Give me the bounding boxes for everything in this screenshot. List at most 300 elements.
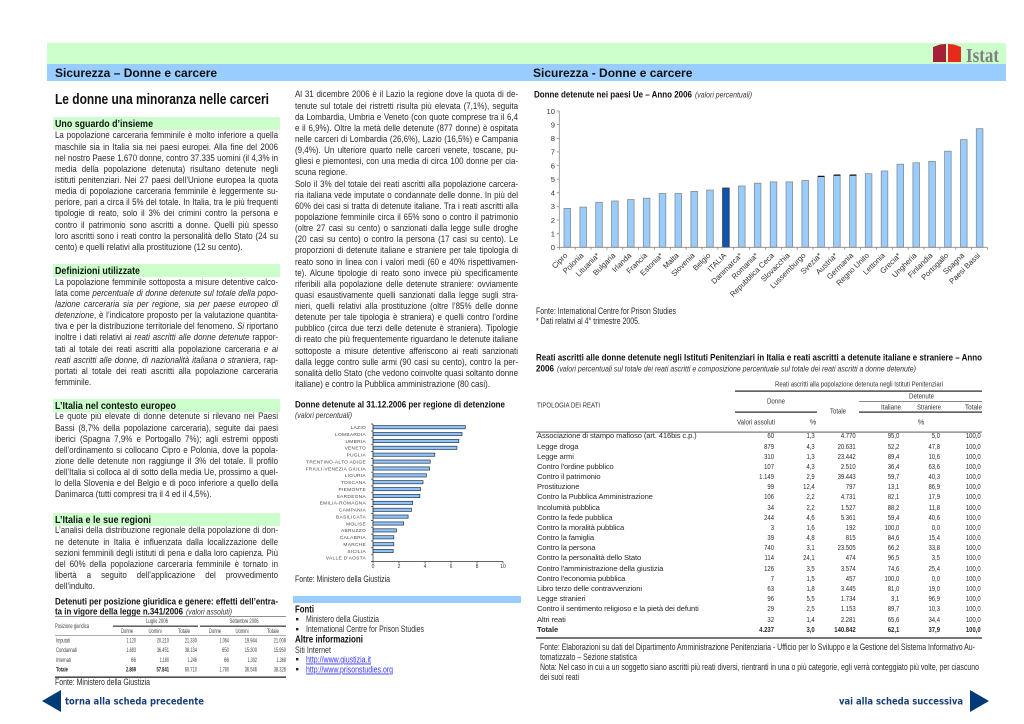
text block: Definizioni utilizzate: portati al totale dei reati ascritti alla popolazione carceraria <box>55 366 278 376</box>
text block: Definizioni utilizzate: inoltre i dati relativi ai reati ascritti alle donne detenute rappor- <box>55 332 278 342</box>
table: detenuti per posizione giuridica: 57.841 <box>156 666 169 673</box>
nav link: next: vai alla scheda successiva <box>839 696 963 708</box>
crimes table rows: 3.574 <box>841 564 856 573</box>
table: detenuti per posizione giuridica: Luglio 2006 <box>146 618 168 625</box>
text block: Uno sguardo d'insieme: nel nostro Paese 1.670 donne, contro 37.335 uomini (il 4,3% in <box>55 153 278 163</box>
text block: L'Italia nel contesto europeo: lo della Slovenia e del Belgio e di poco inferiore a quello della <box>55 478 278 488</box>
crimes table rows: 96 <box>768 594 774 603</box>
crimes table rows: 100,0 <box>966 584 981 593</box>
crimes table rows: 4,8 <box>807 533 815 542</box>
table: detenuti per posizione giuridica: 15.950 <box>274 647 286 654</box>
crimes table rows: 95,0 <box>887 431 899 440</box>
crimes table rows: Contro la Pubblica Amministrazione <box>537 492 653 501</box>
table: detenuti per posizione giuridica: 1.683 <box>126 647 136 654</box>
crimes table rows: 36,4 <box>887 462 899 471</box>
crimes table rows: 1,4 <box>807 614 815 624</box>
text block: middle column: sottoposte a misure detentive afferiscono ai reati sanzionati <box>295 346 518 356</box>
arrow: previous <box>42 690 61 712</box>
table: detenuti per posizione giuridica: 650 <box>222 647 229 654</box>
text block: middle column: sonalità dello Stato (che vedono coinvolte quasi soltanto donne <box>295 368 518 378</box>
crimes table rows: 20.631 <box>838 442 856 451</box>
crimes table rows: 96,9 <box>928 594 940 603</box>
text block: middle column: tenute sul totale dei ristretti risulta più elevata (7,1%), seguita <box>295 101 518 111</box>
text block: middle column: Al 31 dicembre 2006 è il Lazio la regione dove la quota di de- <box>295 89 518 99</box>
EU chart title: (valori percentuali) <box>695 90 752 100</box>
small table title: Detenuti per posizione giuridica e genere: effetti dell’entra- <box>55 596 278 608</box>
crimes table rows: 100,0 <box>966 513 981 522</box>
crimes table rows: 5,5 <box>807 594 815 603</box>
table: detenuti per posizione giuridica: 60.710 <box>185 666 197 673</box>
table: detenuti per posizione giuridica: Internati <box>56 657 71 664</box>
text block: Uno sguardo d'insieme: istituti penitenziari. Nei 27 paesi dell’Unione europea la quota <box>55 175 278 185</box>
crimes table rows: 11,8 <box>929 503 940 512</box>
source and note: crimes table: tomatizzato – Sezione statistica <box>540 652 637 662</box>
text block: middle column: ria italiana vede imputate o condannate delle donne. In più del <box>295 190 518 200</box>
text block: Definizioni utilizzate: reati ascritti alle donne, di nazionalità italiana o straniera, rap- <box>55 355 278 365</box>
text block: Uno sguardo d'insieme <box>55 130 278 252</box>
crimes table rows: 474 <box>846 553 856 562</box>
crimes table rows: 100,0 <box>966 533 981 542</box>
sources and links <box>295 604 424 674</box>
crimes table rows: Legge stranieri <box>537 594 585 603</box>
title: Le donne una minoranza nelle carceri <box>55 91 269 108</box>
table: detenuti per posizione giuridica: 1.302 <box>248 657 257 664</box>
crimes table rows: 89,7 <box>887 604 899 613</box>
text block: middle column: detenute per tale tipologia è straniera) e quelli contro l’ordine <box>295 312 518 322</box>
bar chart: regions: ABRUZZO <box>341 528 366 534</box>
list: links: http://www.prisonstudies.org <box>306 664 393 674</box>
crimes table rows: 100,0 <box>966 442 981 451</box>
crimes table rows: 107 <box>764 462 774 471</box>
bar chart: regions: BASILICATA <box>336 514 366 520</box>
crimes table rows: 3,0 <box>807 625 815 634</box>
table: detenuti per posizione giuridica: 1.246 <box>188 657 197 664</box>
crimes table rows: 60 <box>768 431 774 440</box>
bar chart: regions: MOLISE <box>346 521 366 527</box>
crimes table rows: 3,1 <box>807 543 815 552</box>
crimes table rows: 89,4 <box>887 452 899 461</box>
crimes table rows: 2,5 <box>807 604 815 613</box>
text block: Definizioni utilizzate: detenzione, è l’indicatore proposto per la valutazione quantita- <box>55 310 278 320</box>
crimes table rows: 100,0 <box>966 604 981 613</box>
crimes table rows: 63 <box>768 584 774 593</box>
crimes table rows: 10,6 <box>928 452 940 461</box>
text block: middle column: italiane) e contro la Pubblica amministrazione (80 casi). <box>295 379 490 389</box>
heading: Definizioni utilizzate <box>53 264 280 277</box>
crimes table rows: 879 <box>764 442 774 451</box>
bar chart: regions: LAZIO <box>351 425 366 431</box>
heading: Uno sguardo d'insieme: Uno sguardo d’insieme <box>55 118 153 130</box>
crimes table rows: 40,3 <box>928 472 940 481</box>
list: sources <box>296 614 424 634</box>
bar chart: EU countries: Malta <box>661 251 681 271</box>
bar chart: EU countries: 9 <box>551 120 555 129</box>
blue divider strip <box>293 596 521 603</box>
bar chart: EU countries <box>547 107 988 299</box>
crimes table rows: 52,2 <box>887 442 899 451</box>
crimes table title: 2006 <box>536 364 554 374</box>
section band left: Sicurezza – Donne e carcere <box>55 66 217 80</box>
crimes table rows: 244 <box>764 513 774 522</box>
crimes table header: Straniere <box>917 403 941 412</box>
crimes table rows: 2,9 <box>807 472 815 481</box>
crimes table rows: 1,8 <box>807 584 815 593</box>
bar chart: regions: FRIULI-VENEZIA GIULIA <box>306 466 366 472</box>
text block: L'Italia nel contesto europeo: iberici (Spagna 7,9% e Portogallo 7%); agli estremi opposti <box>55 434 278 444</box>
crimes table rows: 3.445 <box>841 584 856 593</box>
bar chart: regions: VALLE D'AOSTA <box>326 556 366 562</box>
crimes table rows: 88,2 <box>887 503 899 512</box>
crimes table title: Reati ascritti alle donne detenute negli Istituti Penitenziari in Italia e reati ascritti a detenute italiane e straniere – Anno <box>536 351 982 363</box>
bar chart: EU countries: 10 <box>547 107 555 116</box>
crimes table rows: 23.505 <box>838 543 856 552</box>
crimes table rows: 59,4 <box>887 513 899 522</box>
bar chart: EU countries: Slovacchia <box>759 251 792 284</box>
crimes table rows: 62,1 <box>887 625 899 634</box>
text block: middle column: (9,4%). Un ulteriore quarto nelle carceri venete, toscane, pu- <box>295 145 518 155</box>
crimes table rows: 25,4 <box>928 564 940 573</box>
bar chart: regions: 8 <box>476 564 479 570</box>
table: detenuti per posizione giuridica: Posizione giuridica <box>55 623 89 630</box>
crimes table rows: 7 <box>771 574 774 583</box>
bar chart: regions: VENETO <box>345 446 366 452</box>
bar chart: regions: EMILIA-ROMAGNA <box>320 501 366 507</box>
crimes table rows: Prostituzione <box>537 482 579 491</box>
crimes table rows: 1.527 <box>841 503 856 512</box>
section band left <box>47 64 520 81</box>
text block: Definizioni utilizzate: tati al totale dei reati ascritti alla popolazione carceraria e ai <box>55 344 278 354</box>
bar chart: EU countries: Belgio <box>691 251 712 273</box>
bar chart: EU countries: Cipro <box>550 251 569 270</box>
crimes table rows: 59,7 <box>887 472 899 481</box>
table: detenuti per posizione giuridica: 1.780 <box>220 666 229 673</box>
bar chart: regions: 10 <box>500 564 506 570</box>
bar chart: regions: CALABRIA <box>340 535 366 541</box>
crimes table rows: 100,0 <box>966 472 981 481</box>
bar chart: EU countries: Lituania* <box>574 251 601 279</box>
crimes table rows: 3,1 <box>891 594 899 603</box>
text block: Definizioni utilizzate: femminile. <box>55 377 91 387</box>
bar chart: EU countries: 8 <box>551 134 555 143</box>
table: detenuti per posizione giuridica <box>55 616 286 678</box>
crimes table title <box>536 351 982 374</box>
heading: Definizioni utilizzate: Definizioni utilizzate <box>55 265 140 277</box>
section band right <box>520 64 1006 81</box>
header band: green <box>47 43 1006 64</box>
crimes table rows: 39.443 <box>838 472 856 481</box>
regional chart subtitle: (valori percentuali) <box>295 410 352 420</box>
table: detenuti per posizione giuridica: Condannati <box>56 647 77 654</box>
text block: L'Italia e le sue regioni <box>55 525 278 591</box>
bar chart: regions: UMBRIA <box>346 439 366 445</box>
crimes table rows: 100,0 <box>966 543 981 552</box>
crimes table rows: 100,0 <box>966 492 981 501</box>
bar chart: EU countries: Lussemburgo <box>768 251 808 290</box>
crimes table header: Totale <box>830 407 846 416</box>
heading: Uno sguardo d'insieme <box>53 117 280 130</box>
crimes table rows: 82,1 <box>887 492 899 501</box>
crimes table rows: 81,0 <box>887 584 899 593</box>
text block: Uno sguardo d'insieme: media di popolazione carceraria femminile è leggermente su- <box>55 186 278 196</box>
text block: Uno sguardo d'insieme: La popolazione carceraria femminile è molto inferiore a quella <box>55 130 278 140</box>
crimes table rows: Contro il patrimonio <box>537 472 600 481</box>
crimes table rows: 74,6 <box>887 564 899 573</box>
crimes table rows: 126 <box>764 564 774 573</box>
bar chart: EU countries: Polonia <box>561 251 586 276</box>
text block: middle column: reato sono in linea con i valori medi (60 e 40% rispettivamen- <box>295 256 518 266</box>
source: regional chart: Fonte: Ministero della Giustizia <box>295 574 390 584</box>
text block: L'Italia e le sue regioni: del 60% della popolazione carceraria femminile è tornato in <box>55 559 278 569</box>
crimes table rows: 2.510 <box>841 462 856 471</box>
crimes table rows: 4,3 <box>807 462 815 471</box>
source and note: EU chart: Fonte: International Centre for Prison Studies <box>536 306 676 316</box>
text block: L'Italia nel contesto europeo: dell’ordinamento si collocano Cipro e Polonia, dove la popola- <box>55 445 278 455</box>
crimes table rows: 39 <box>768 533 774 542</box>
crimes table rows: 1.153 <box>841 604 856 613</box>
crimes table rows: Contro l'ordine pubblico <box>537 462 614 471</box>
heading: L'Italia e le sue regioni <box>53 513 280 526</box>
crimes table rows: 84,6 <box>887 533 899 542</box>
bar chart: regions: MARCHE <box>343 542 366 548</box>
text block: middle column: te). Alcune tipologie di reato sono invece più specificamente <box>295 268 518 278</box>
crimes table rows: 797 <box>846 482 856 491</box>
bar chart: regions: TRENTINO-ALTO ADIGE <box>306 459 366 465</box>
text block: L'Italia nel contesto europeo: Bassi (8,7% della popolazione carceraria), seguite dai paesi <box>55 423 278 433</box>
crimes table rows: 1.734 <box>841 594 856 603</box>
bar chart: EU countries: 5 <box>551 175 555 184</box>
icon: Istat logo: Istat <box>966 45 999 67</box>
text block: L'Italia e le sue regioni: ne detenute in Italia è influenzata dalla localizzazione delle <box>55 537 278 547</box>
table: detenuti per posizione giuridica: 66 <box>131 657 136 664</box>
crimes table rows: 4,6 <box>807 513 815 522</box>
bar chart: regions: LIGURIA <box>345 473 366 479</box>
crimes table rows: 100,0 <box>966 462 981 471</box>
text block: Uno sguardo d'insieme: media della popolazione detenuta) risultano detenute negli <box>55 164 278 174</box>
bar chart: EU countries: ITALIA <box>706 250 729 274</box>
text block: middle column: da Lombardia, Umbria e Veneto (con quote comprese tra il 6,4 <box>295 112 518 122</box>
crimes table rows: Legge armi <box>537 452 574 461</box>
bar chart: EU countries: 0 <box>551 243 555 252</box>
table: detenuti per posizione giuridica: 36.451 <box>157 647 169 654</box>
crimes table rows: 100,0 <box>966 625 981 634</box>
text block: Definizioni utilizzate: lata come percentuale di donne detenute sul totale della popo- <box>55 288 278 298</box>
crimes table rows: 100,0 <box>966 594 981 603</box>
crimes table title: (valori percentuali sul totale dei reati ascritti e composizione percentuale sul totale dei reati ascritti a donne detenute) <box>557 364 916 374</box>
crimes table rows: 2.281 <box>841 614 856 624</box>
bar chart: EU countries: Regno Unito <box>834 251 871 288</box>
text block: Definizioni utilizzate: lazione carceraria sia per regione, sia per paese europeo di <box>55 299 278 309</box>
text block: L'Italia nel contesto europeo: dell’Italia si colloca al di sotto della media Ue, prossimo a quel- <box>55 467 278 477</box>
table: detenuti per posizione giuridica: 15.300 <box>245 647 257 654</box>
bar chart: EU countries: Svezia* <box>799 251 824 276</box>
bar chart: EU countries: Spagna <box>941 251 967 276</box>
crimes table rows: 29 <box>768 604 774 613</box>
bar chart: EU countries: Paesi Bassi <box>947 251 982 286</box>
bar chart: regions: LOMBARDIA <box>335 432 366 438</box>
small table title <box>55 596 278 618</box>
crimes table rows: Legge droga <box>537 442 578 451</box>
text block: L'Italia nel contesto europeo <box>55 411 278 499</box>
crimes table header <box>536 380 982 433</box>
table: detenuti per posizione giuridica: Totale <box>178 628 190 635</box>
source and note: EU chart <box>536 306 676 326</box>
text block: middle column: nieri, quelli relativi alla prostituzione (oltre l’85% delle donne <box>295 301 518 311</box>
crimes table rows: 19,0 <box>928 584 940 593</box>
text block: middle column: di reato che più frequentemente riguardano le detenute italiane <box>295 334 518 344</box>
EU chart title: Donne detenute nei paesi Ue – Anno 2006 <box>534 90 692 100</box>
text block: Definizioni utilizzate <box>55 277 278 387</box>
crimes table rows: 4,3 <box>807 442 815 451</box>
crimes table rows: 457 <box>846 574 856 583</box>
crimes table rows: 10,3 <box>928 604 940 613</box>
table: detenuti per posizione giuridica: 38.134 <box>185 647 197 654</box>
crimes table rows: 100,0 <box>966 564 981 573</box>
list: links: http://www.giustizia.it <box>306 654 371 664</box>
crimes table rows: Contro la fede pubblica <box>537 513 612 522</box>
bar chart: EU countries: 4 <box>551 189 555 198</box>
text block: middle column: riferibili alla popolazione delle detenute straniere: ovviamente <box>295 279 518 289</box>
crimes table rows: 4.770 <box>841 431 856 440</box>
text block: Uno sguardo d'insieme: periore, pari a circa il 5% del totale. In Italia, tra le più frequenti <box>55 197 278 207</box>
table: detenuti per posizione giuridica: 1.180 <box>160 657 169 664</box>
table: detenuti per posizione giuridica: Uomini <box>148 628 162 635</box>
table: detenuti per posizione giuridica: 19.944 <box>245 637 257 644</box>
text block: L'Italia nel contesto europeo: Danimarca (tutti compresi tra il 4 ed il 4,5%). <box>55 489 212 499</box>
source and note: crimes table: Fonte: Elaborazioni su dati del Dipartimento Amministrazione Penitenziaria - Ufficio per lo Sviluppo e la Gestione del Sistema Informativo Au- <box>540 642 975 652</box>
bar chart: regions: SICILIA <box>347 549 366 555</box>
text block: middle column: e il 6,9%). Oltre la metà delle detenute (877 donne) è ospitata <box>295 123 518 133</box>
crimes table rows: Contro la personalità dello Stato <box>537 553 641 562</box>
bar chart: EU countries: Danimarca* <box>709 251 744 286</box>
table: detenuti per posizione giuridica: 38.326 <box>274 666 286 673</box>
text block: Uno sguardo d'insieme: contro il patrimonio sono ascritti a donne. Quelli più spesso <box>55 220 278 230</box>
crimes table rows: 33,8 <box>928 543 940 552</box>
text block: middle column: nelle carceri di Lombardia (26,6%), Lazio (16,5%) e Campania <box>295 134 518 144</box>
table: detenuti per posizione giuridica: Totale <box>267 628 279 635</box>
heading: L'Italia nel contesto europeo: L’Italia nel contesto europeo <box>55 400 176 412</box>
table: detenuti per posizione giuridica: 1.120 <box>126 637 136 644</box>
crimes table rows: 86,9 <box>928 482 940 491</box>
crimes table rows: Contro l'amministrazione della giustizia <box>537 564 663 573</box>
crimes table rows: 192 <box>846 523 856 532</box>
text block: middle column: quasi esaustivamente quelli sanzionati dalla legge sugli stra- <box>295 290 518 300</box>
crimes table rows: 2,2 <box>807 503 815 512</box>
text block: Definizioni utilizzate: tiva e per la distribuzione territoriale del fenomeno. Si riportano <box>55 321 278 331</box>
bar chart: EU countries: Romania* <box>730 251 760 281</box>
crimes table rows: 96,5 <box>887 553 899 562</box>
crimes table rows: 100,0 <box>966 523 981 532</box>
crimes table rows: Incolumità pubblica <box>537 503 600 512</box>
text block: middle column: 60% dei casi si tratta di detenute italiane. Tra i reati ascritti alla <box>295 201 518 211</box>
table: detenuti per posizione giuridica: Totale <box>56 666 68 673</box>
heading: Fonti: Fonti <box>295 604 314 616</box>
crimes table rows: 100,0 <box>966 574 981 583</box>
source: small table: Fonte: Ministero della Giustizia <box>55 677 150 687</box>
crimes table rows: 310 <box>764 452 774 461</box>
bar chart: regions: SARDEGNA <box>337 494 366 500</box>
table: detenuti per posizione giuridica: Settembre 2006 <box>230 618 259 625</box>
bar chart: EU countries: 3 <box>551 202 555 211</box>
crimes table rows: 100,0 <box>966 482 981 491</box>
text block: L'Italia nel contesto europeo: zione delle detenute non raggiunge il 3% del totale. Il profilo <box>55 456 278 466</box>
crimes table rows: 140.842 <box>834 625 856 634</box>
text block: middle column: popolazione femminile circa il 65% sono o contro il patrimonio <box>295 212 518 222</box>
list: links: Siti Internet <box>295 645 331 655</box>
crimes table rows: 47,8 <box>928 442 940 451</box>
text block: middle column: (oltre 27 casi su cento) o sanzionati dalla legge sulle droghe <box>295 223 518 233</box>
bar chart: EU countries: Finlandia <box>906 251 935 279</box>
crimes table rows: 13,1 <box>887 482 899 491</box>
bar chart: regions: PUGLIA <box>347 452 366 458</box>
text block: middle column: (20 casi su cento) o contro la persona (17 casi su cento). Le <box>295 234 518 244</box>
crimes table rows: 12,4 <box>803 482 815 491</box>
heading: L'Italia nel contesto europeo <box>53 399 280 412</box>
text block: middle column: proporzioni di detenute italiane e straniere per tale tipologia di <box>295 245 518 255</box>
text block: middle column: dalla legge contro sulle armi (90 casi su cento), contro la per- <box>295 357 518 367</box>
crimes table rows: 1,5 <box>807 574 815 583</box>
table: detenuti per posizione giuridica: 36.546 <box>245 666 257 673</box>
crimes table header: Detenute <box>909 392 934 401</box>
crimes table rows: 100,0 <box>966 452 981 461</box>
crimes table rows: 100,0 <box>966 553 981 562</box>
table: detenuti per posizione giuridica: Donne <box>121 628 133 635</box>
text block: L'Italia e le sue regioni: sezioni femminili degli istituti di pena e dalla loro capienza. Più <box>55 548 278 558</box>
crimes table rows: 5.361 <box>841 513 856 522</box>
crimes table rows: 114 <box>765 553 774 562</box>
bar chart: regions: 0 <box>372 564 375 570</box>
bar chart: EU countries: 2 <box>551 216 555 225</box>
crimes table rows: 100,0 <box>966 614 981 624</box>
list: sources: International Centre for Prison Studies <box>306 624 424 634</box>
crimes table rows: 4.237 <box>759 625 774 634</box>
crimes table rows: Totale <box>537 625 558 634</box>
crimes table header: Valori assoluti <box>737 418 775 427</box>
crimes table rows: Associazione di stampo mafioso (art. 416bis c.p.) <box>537 431 697 440</box>
list: links <box>295 645 393 674</box>
crimes table header: Donne <box>767 397 785 406</box>
bar chart: EU countries: Estonia* <box>638 251 665 278</box>
bar chart: EU countries: Ungheria <box>890 251 919 279</box>
crimes table rows: 0,0 <box>932 523 940 532</box>
crimes table rows: 63,6 <box>928 462 940 471</box>
arrow: next <box>970 690 989 712</box>
source and note: crimes table <box>540 642 979 682</box>
crimes table rows: 100,0 <box>966 431 981 440</box>
crimes table rows: 34,4 <box>928 614 940 624</box>
text block: middle column: gliesi e piemontesi, con una media di circa 100 donne per cia- <box>295 156 518 166</box>
bar chart: regions: 2 <box>398 564 401 570</box>
text block: L'Italia e le sue regioni: libertà a seguito dell’applicazione del provvedimento <box>55 570 278 580</box>
table: detenuti per posizione giuridica: 21.330 <box>185 637 197 644</box>
crimes table rows: 0,0 <box>932 574 940 583</box>
table: detenuti per posizione giuridica: 1.064 <box>220 637 229 644</box>
text block: L'Italia e le sue regioni: L’analisi della distribuzione regionale della popolazione di don- <box>55 525 278 535</box>
table: detenuti per posizione giuridica: 1.368 <box>276 657 286 664</box>
nav link: previous: torna alla scheda precedente <box>65 696 204 708</box>
small table title: ta in vigore della legge n.341/2006 <box>55 606 183 618</box>
bar chart: EU countries: Irlanda <box>610 251 634 274</box>
text block: Uno sguardo d'insieme: maschile sia in Italia sia nei paesi europei. Alla fine del 2006 <box>55 142 278 152</box>
crimes table rows: 100,0 <box>966 503 981 512</box>
text block: middle column: Solo il 3% del totale dei reati ascritti alla popolazione carcera- <box>295 179 518 189</box>
bar chart: EU countries: Lettonia <box>861 251 887 277</box>
table: detenuti per posizione giuridica: Donne <box>209 628 221 635</box>
table: detenuti per posizione giuridica: 66 <box>224 657 229 664</box>
crimes table rows: 1,6 <box>807 523 815 532</box>
crimes table rows: 100,0 <box>884 523 899 532</box>
bar chart: regions <box>306 424 506 570</box>
bar chart: regions: CAMPANIA <box>339 508 366 514</box>
